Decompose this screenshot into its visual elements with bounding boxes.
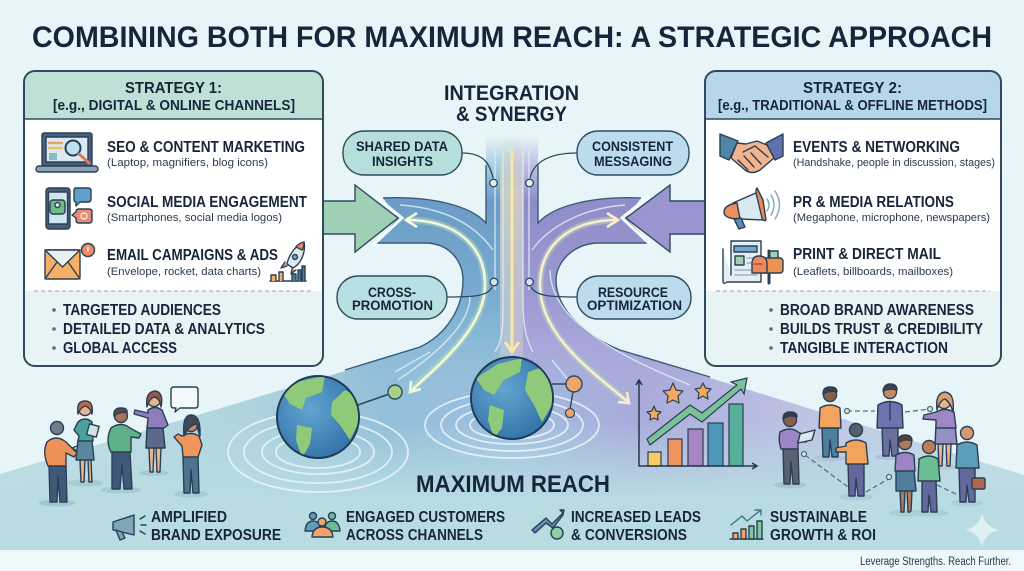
outcome: sustainable growth (730, 509, 876, 544)
benefits list: strategy 2: BROAD BRAND AWARENESS (780, 302, 974, 319)
stream: centre channel (500, 135, 523, 360)
chart bars (648, 404, 743, 466)
icon: envelope with badge (45, 244, 94, 279)
heading: integration and synergy: & SYNERGY (456, 103, 567, 126)
outcome: sustainable growth: GROWTH & ROI (770, 527, 876, 544)
person: orange shirt (39, 422, 82, 506)
icon: newspaper and mailbox (723, 241, 783, 283)
icon: small growth chart (730, 510, 763, 539)
benefits list: strategy 1: GLOBAL ACCESS (63, 340, 177, 357)
footer band (0, 550, 1024, 571)
item: print (793, 246, 953, 278)
arrow: left green into streams (323, 185, 398, 252)
chart trend arrow (647, 378, 747, 445)
growth chart (636, 378, 757, 469)
outcome: increased leads: & CONVERSIONS (571, 527, 687, 544)
flow glow: left and right (407, 220, 628, 402)
pill: consistent messaging: MESSAGING (594, 154, 672, 169)
benefits list: strategy 1: DETAILED DATA & ANALYTICS (63, 321, 265, 338)
pill: cross-promotion: PROMOTION (352, 298, 433, 313)
benefits list: strategy 1: TARGETED AUDIENCES (63, 302, 221, 319)
arrow: right purple into streams (626, 185, 705, 252)
pill: cross-promotion: CROSS- (368, 285, 416, 300)
item: email (107, 247, 278, 278)
icon: laptop with magnifier (36, 133, 98, 172)
sparkle mark (965, 513, 999, 547)
pill: shared data insights: INSIGHTS (372, 154, 433, 169)
panel: strategy 2 (705, 71, 1001, 366)
icon: trend arrow and coin (532, 510, 564, 539)
chart axes (636, 380, 757, 469)
strategy 1 heading: STRATEGY 1: (125, 80, 222, 97)
pill: shared data insights (343, 131, 462, 175)
person: orange sweater (814, 387, 846, 462)
item: social media: SOCIAL MEDIA ENGAGEMENT (107, 194, 307, 211)
people: left group (39, 387, 208, 506)
outcome: amplified brand exposure (113, 509, 281, 544)
pill: shared data insights: SHARED DATA (356, 139, 448, 154)
item: email: (Envelope, rocket, data charts) (107, 266, 261, 278)
item: social media: (Smartphones, social media logos) (107, 212, 282, 224)
person: purple with tablet (774, 412, 815, 488)
item: PR: PR & MEDIA RELATIONS (793, 194, 954, 211)
flow line: centre yellow arrow (505, 150, 519, 352)
person: teal woman (67, 401, 103, 486)
item: PR: (Megaphone, microphone, newspapers) (793, 212, 990, 224)
strategy 1 heading (53, 80, 295, 114)
outcome: engaged customers: ENGAGED CUSTOMERS (346, 509, 505, 526)
strategy 1 heading: [e.g., DIGITAL & ONLINE CHANNELS] (53, 97, 295, 114)
item: events: EVENTS & NETWORKING (793, 139, 960, 156)
heading: maximum reach: MAXIMUM REACH (416, 471, 610, 498)
icon: small megaphone (113, 515, 146, 540)
benefits list: strategy 2: TANGIBLE INTERACTION (780, 340, 948, 357)
item: SEO: (Laptop, magnifiers, blog icons) (107, 157, 268, 169)
outcome: engaged customers: ACROSS CHANNELS (346, 527, 483, 544)
speech bubble (171, 387, 198, 412)
item: SEO: SEO & CONTENT MARKETING (107, 139, 305, 156)
ripples (228, 392, 599, 492)
people: right group (774, 384, 985, 516)
item: events: (Handshake, people in discussion, stages) (793, 157, 995, 169)
heading: integration and synergy: INTEGRATION (444, 82, 579, 105)
arrow tip highlights (372, 196, 652, 246)
item: events (793, 139, 995, 169)
globe node: left (358, 385, 402, 405)
outcome: increased leads (532, 509, 701, 544)
heading: integration and synergy (444, 82, 579, 126)
icon: rocket and data chart (270, 242, 306, 281)
stream edge lines (345, 165, 710, 377)
person: orange back view (836, 424, 873, 500)
person: suit (875, 384, 905, 460)
outcome: amplified brand exposure: AMPLIFIED (151, 509, 227, 526)
connectors to pills (447, 153, 577, 297)
pill: cross-promotion (337, 276, 447, 319)
title: COMBINING BOTH FOR MAXIMUM REACH: A STRATEGIC APPROACH (32, 21, 992, 54)
stream: left blue (345, 135, 512, 400)
person: purple woman (134, 391, 169, 476)
benefits list: strategy 2: BUILDS TRUST & CREDIBILITY (780, 321, 983, 338)
person: green sweater (910, 440, 948, 516)
item: PR (793, 194, 990, 224)
pill: resource optimization: OPTIMIZATION (587, 298, 682, 313)
item: print: (Leaflets, billboards, mailboxes) (793, 266, 953, 278)
network dashed links: right group (805, 409, 958, 495)
person: orange woman (174, 415, 208, 498)
pill: resource optimization: RESOURCE (598, 285, 668, 300)
globe: centre (471, 357, 556, 439)
person: woman in skirt (889, 435, 921, 516)
outcome: amplified brand exposure: BRAND EXPOSURE (151, 527, 281, 544)
globe nodes: centre (552, 376, 582, 418)
pill: resource optimization (577, 276, 691, 319)
outcome: engaged customers (305, 509, 505, 544)
pill: consistent messaging: CONSISTENT (592, 139, 674, 154)
item: email: EMAIL CAMPAIGNS & ADS (107, 247, 278, 264)
outcome: increased leads: INCREASED LEADS (571, 509, 701, 526)
icon: handshake (720, 134, 783, 172)
stream: right purple (512, 135, 710, 400)
flow line: right curve arrow (540, 213, 629, 403)
item: SEO (107, 139, 305, 169)
outcome: sustainable growth: SUSTAINABLE (770, 509, 867, 526)
strategy 2 heading: [e.g., TRADITIONAL & OFFLINE METHODS] (718, 97, 987, 114)
item: social media (107, 194, 307, 224)
panel: strategy 1 (24, 71, 323, 366)
globe: left (277, 376, 362, 458)
benefits list: strategy 2 (769, 302, 983, 357)
chart stars (647, 383, 711, 420)
strategy 2 heading: STRATEGY 2: (803, 80, 902, 97)
flow lines: pale streaks (395, 150, 690, 385)
flow line: left curve arrow (406, 213, 485, 392)
icon: people group (305, 512, 340, 537)
benefits list: strategy 1 (52, 302, 265, 357)
icon: smartphone with social bubbles (46, 188, 92, 229)
strategy 2 heading (718, 80, 987, 114)
ground: maximum reach area (0, 352, 1024, 550)
icon: megaphone (724, 188, 780, 229)
person: green shirt (101, 408, 141, 494)
network nodes: right group (802, 406, 932, 480)
converging streams (345, 135, 710, 403)
pill: consistent messaging (577, 131, 689, 175)
person: teal sweater with briefcase (951, 426, 985, 506)
person: blonde woman (923, 392, 957, 470)
item: print: PRINT & DIRECT MAIL (793, 246, 941, 263)
